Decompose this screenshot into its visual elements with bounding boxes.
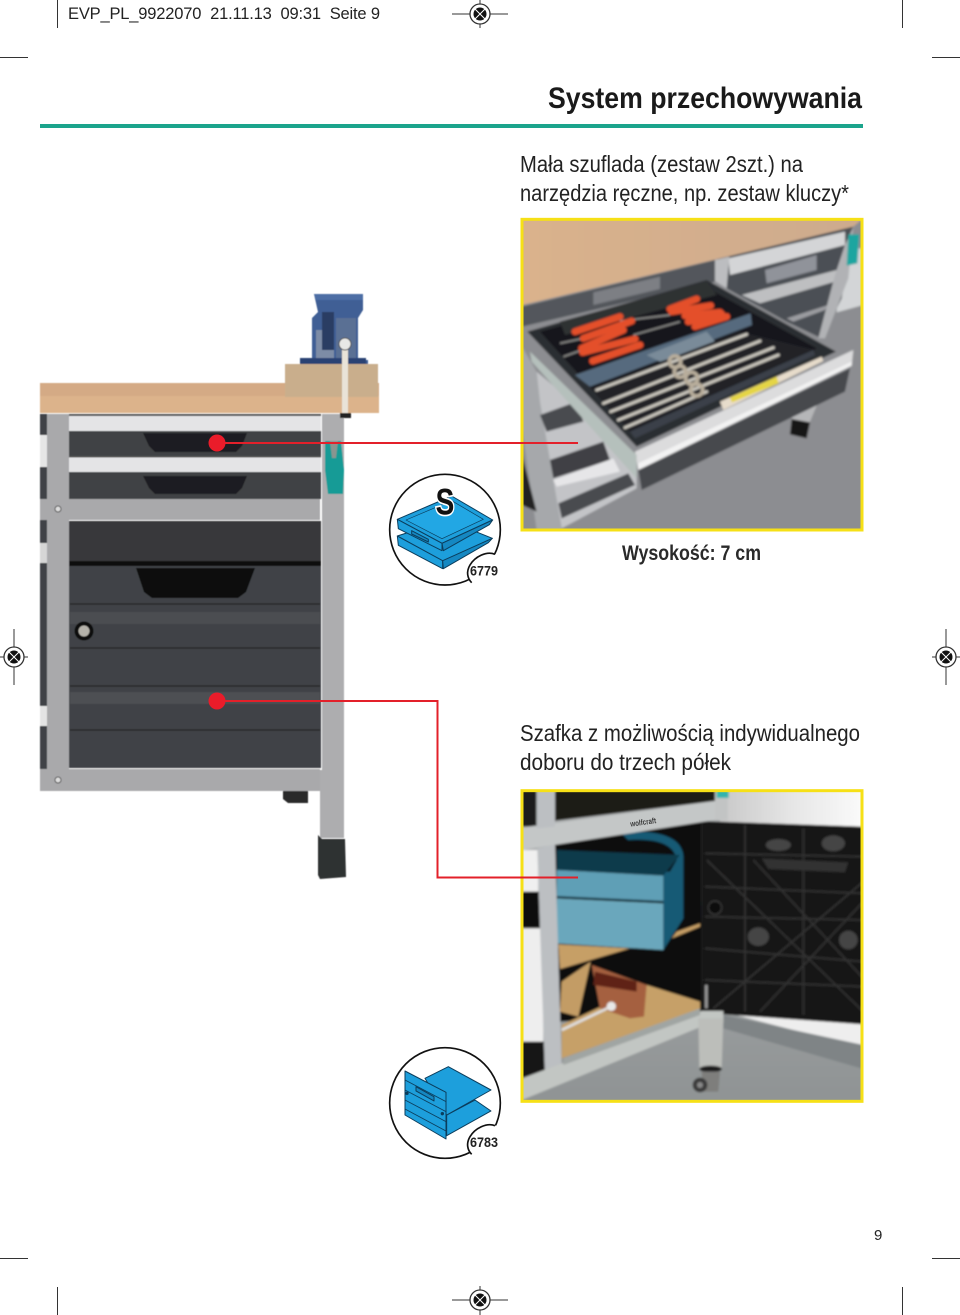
text: small drawer description: Mała szuflada (zestaw 2szt.) na xyxy=(520,151,803,177)
wrenches xyxy=(597,334,778,428)
page number: 9 xyxy=(874,1227,882,1244)
badge 6783 xyxy=(390,1048,513,1167)
yellow frame xyxy=(522,791,862,1101)
left edge strip xyxy=(40,414,47,770)
frame xyxy=(522,801,715,850)
bench top xyxy=(40,364,379,413)
icon: S size letter: S xyxy=(436,480,454,522)
vise in cabinet xyxy=(560,962,591,1017)
left drawers xyxy=(524,792,538,828)
second drawer xyxy=(69,456,321,499)
text: small drawer description: narzędzia ręczne, np. zestaw kluczy* xyxy=(520,180,849,206)
title rule xyxy=(40,124,863,128)
drawer front xyxy=(635,350,853,470)
left frame xyxy=(522,347,562,530)
tray xyxy=(527,280,836,447)
caster xyxy=(699,1066,722,1072)
vise xyxy=(300,294,368,366)
registration mark bottom xyxy=(452,1286,508,1315)
cross bar xyxy=(40,499,320,520)
photo: open drawer with tools xyxy=(520,215,865,535)
registration mark right xyxy=(932,629,960,685)
number 6783: 6783 xyxy=(470,1134,498,1150)
print slug line: EVP_PL_9922070 21.11.13 09:31 Seite 9 xyxy=(68,5,380,23)
yellow frame xyxy=(522,219,862,530)
interior xyxy=(555,820,702,1022)
height label: Wysokość: 7 cm xyxy=(622,542,761,565)
pliers xyxy=(560,315,680,357)
registration mark left xyxy=(0,629,28,685)
door back xyxy=(702,821,863,1024)
leg xyxy=(791,404,817,424)
right cabinet xyxy=(717,225,853,338)
icon: cabinet with shelves xyxy=(405,1067,491,1139)
worktop xyxy=(522,219,862,305)
callout line: cabinet xyxy=(208,692,578,878)
lower shelf xyxy=(562,985,700,1058)
icon: lower drawer xyxy=(397,520,492,569)
registration mark top xyxy=(452,0,508,28)
handle rod of vise xyxy=(339,338,351,418)
text: cabinet description: Szafka z możliwością indywidualnego xyxy=(520,720,860,746)
right post and leg xyxy=(320,414,344,838)
cabinet door xyxy=(69,521,321,768)
ruler xyxy=(720,357,823,410)
brand plate: wolfcraft xyxy=(629,816,657,829)
text: cabinet description: doboru do trzech półek xyxy=(520,749,731,775)
toolbox xyxy=(620,831,683,950)
number 6779: 6779 xyxy=(470,562,498,578)
text: small drawer description xyxy=(520,151,849,206)
icon: upper drawer xyxy=(397,496,493,551)
teal clip xyxy=(325,441,344,494)
photo: open cabinet with shelves xyxy=(520,785,865,1105)
baseboard xyxy=(738,1014,860,1046)
upper drawer xyxy=(69,414,321,456)
teal clip xyxy=(847,234,859,266)
title: System przechowywania xyxy=(548,82,862,115)
foot xyxy=(318,835,346,879)
badge 6779 xyxy=(390,474,513,593)
rail under top xyxy=(522,260,715,327)
workbench photo xyxy=(40,294,379,879)
upper shelf xyxy=(558,944,630,969)
left post xyxy=(47,414,69,770)
text: cabinet description xyxy=(520,720,860,775)
bottom bar xyxy=(40,769,320,803)
upper drawer xyxy=(553,790,715,821)
callout line: drawer xyxy=(208,434,578,452)
